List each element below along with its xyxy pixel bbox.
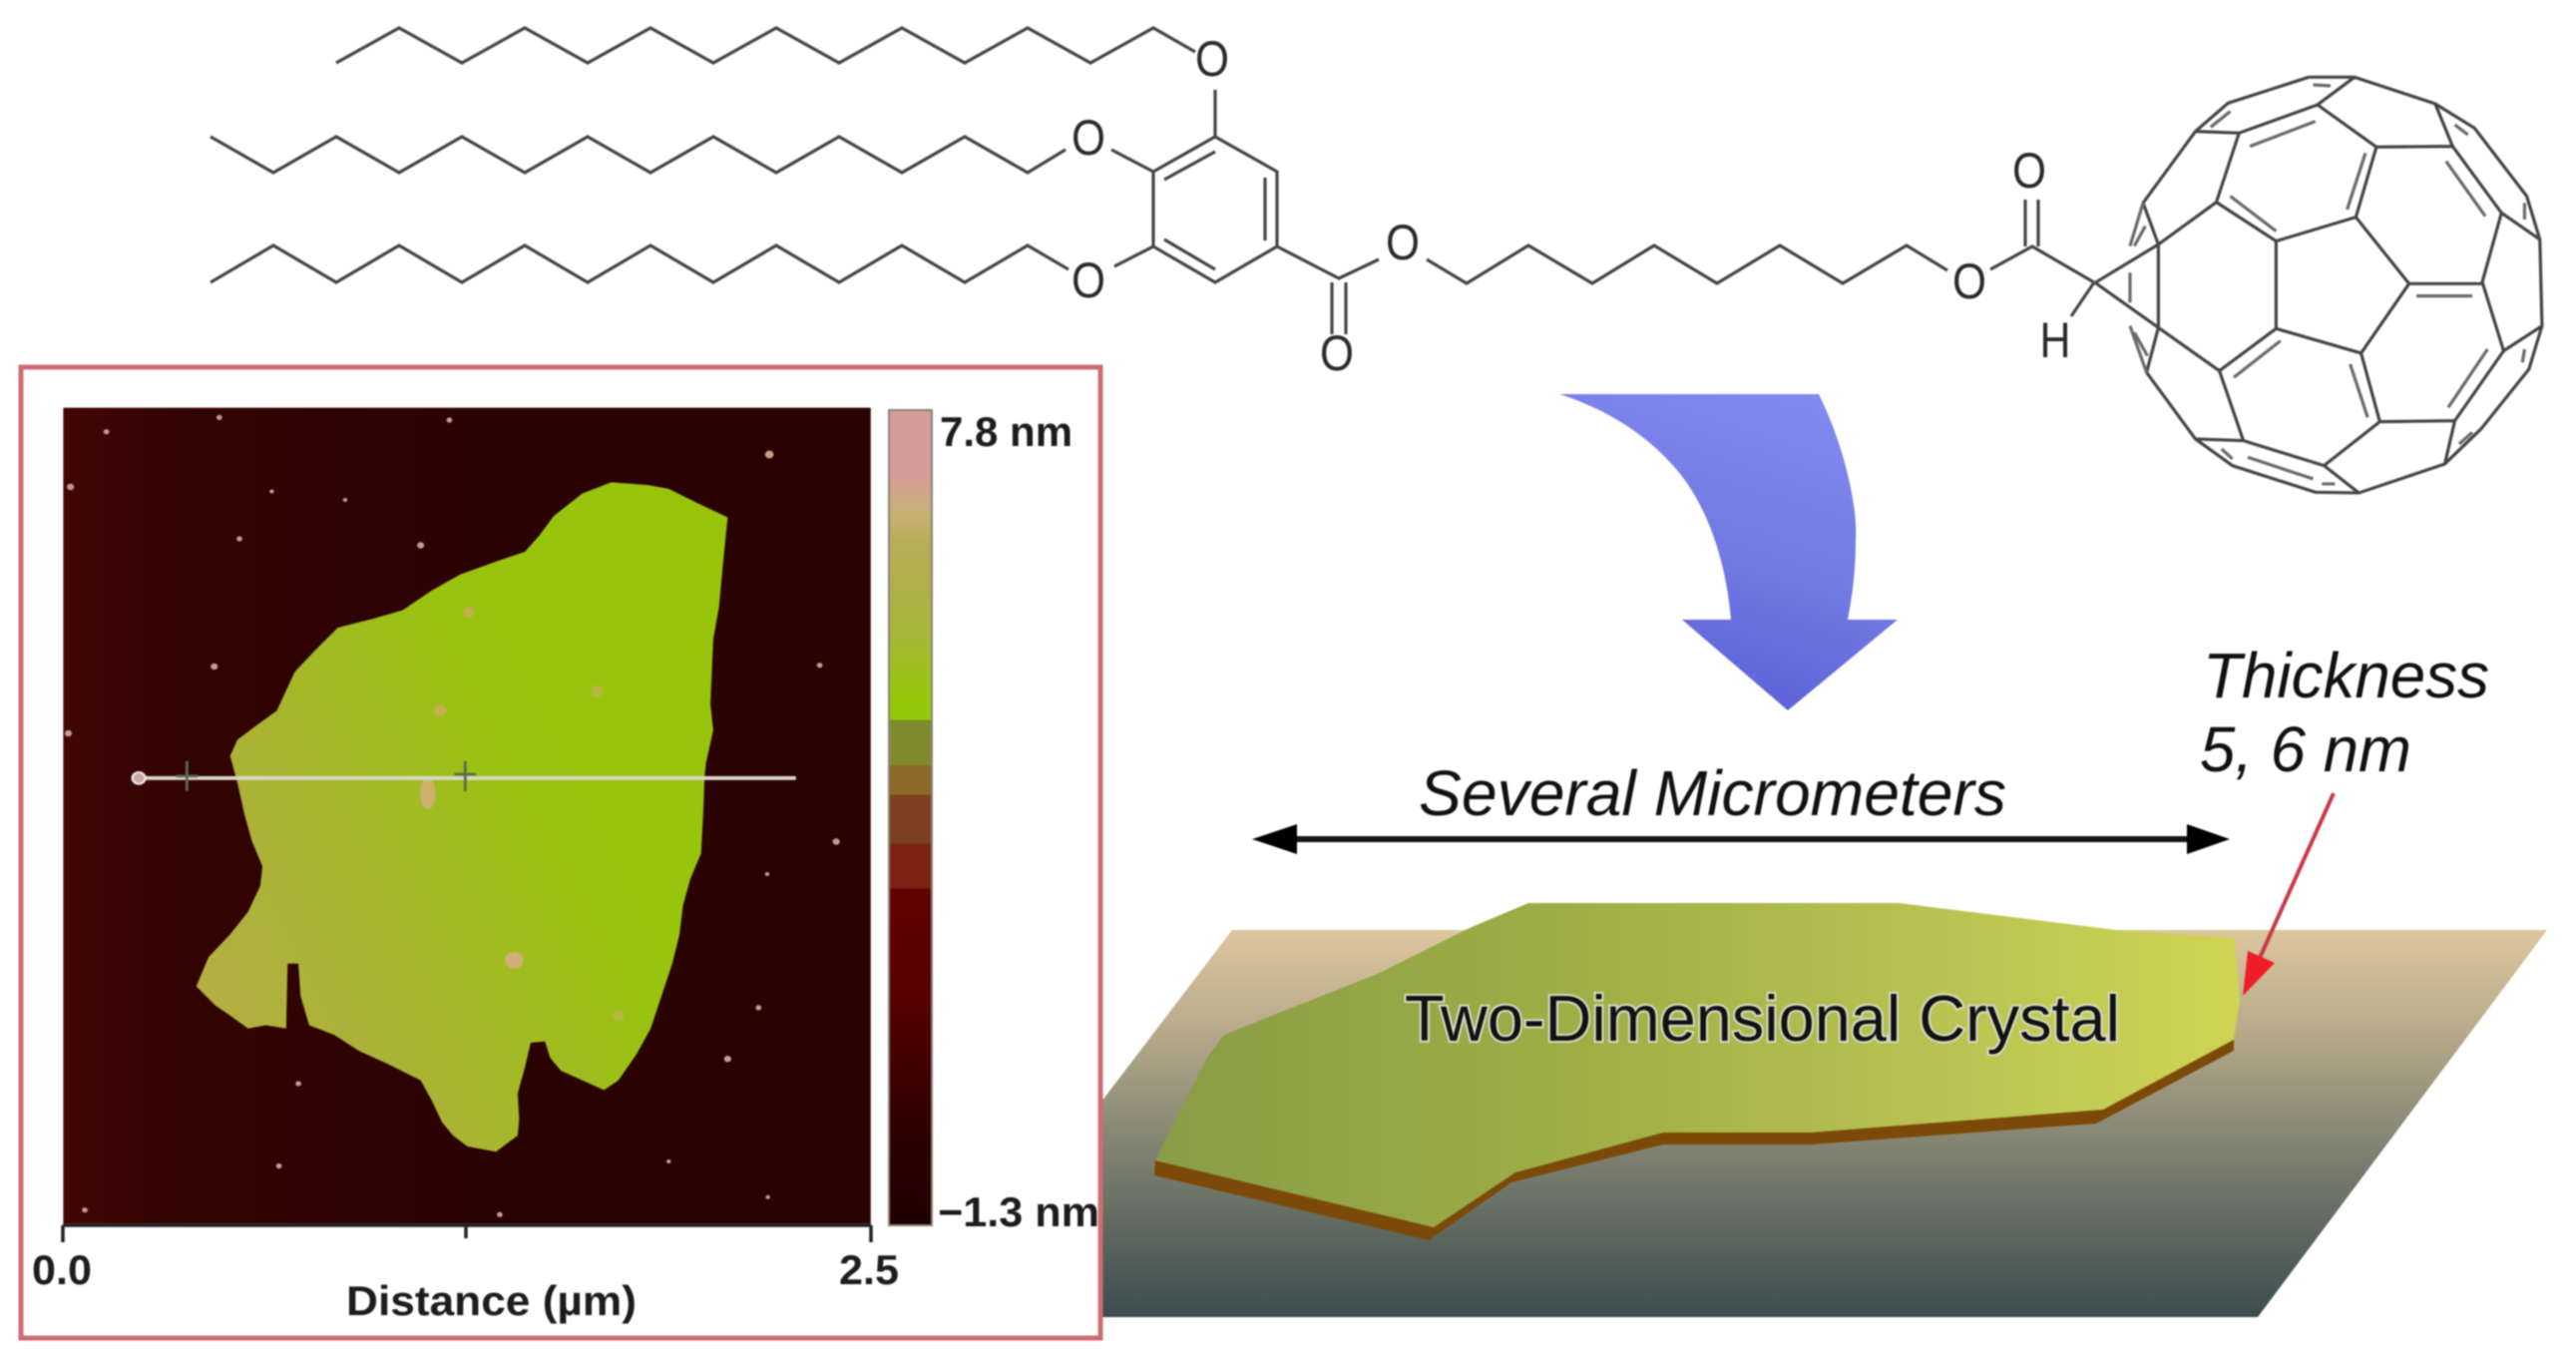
AFM image — [63, 408, 871, 1223]
crystal top face — [1155, 903, 2240, 1227]
crystal island — [197, 482, 727, 1151]
height colour bar — [889, 410, 932, 1225]
top alkyl chain — [336, 28, 1195, 63]
oxygen and hydrogen atom labels: O — [1320, 325, 1354, 381]
width label: Several Micrometers — [1419, 757, 2006, 829]
fullerene inner double bonds — [2130, 85, 2524, 484]
ester group and linker chain — [1277, 200, 2094, 334]
axis start label: 0.0 — [32, 1246, 92, 1293]
oxygen and hydrogen atom labels — [1072, 31, 2071, 381]
oxygen and hydrogen atom labels: O — [1072, 110, 1105, 166]
crystal label: Two-Dimensional Crystal — [1405, 982, 2120, 1055]
thickness label: Thickness — [2203, 640, 2489, 711]
thickness label: 5, 6 nm — [2200, 713, 2411, 785]
C60 fullerene cage — [2095, 77, 2542, 493]
colour bar min label: −1.3 nm — [938, 1188, 1099, 1235]
axis title: Distance (µm) — [346, 1277, 637, 1324]
oxygen and hydrogen atom labels: O — [1072, 252, 1105, 308]
curved blue arrow — [1559, 394, 1898, 710]
substrate plane — [1101, 930, 2547, 1317]
double-headed width arrow — [1252, 824, 2230, 854]
middle alkyl chain — [211, 137, 1066, 173]
axis end label: 2.5 — [839, 1246, 899, 1293]
bottom alkyl chain — [211, 245, 1069, 282]
surface speckles — [65, 415, 840, 1217]
distance axis — [63, 1225, 871, 1242]
scan line with markers — [133, 761, 796, 791]
2D crystal slab — [1154, 903, 2240, 1240]
panel frame — [21, 367, 1100, 1338]
oxygen and hydrogen atom labels: O — [1386, 215, 1420, 270]
benzene ring — [1111, 90, 1277, 282]
oxygen and hydrogen atom labels: H — [2039, 312, 2071, 368]
thickness label — [2200, 640, 2489, 785]
molecule: alkyl chains, benzene ring and linker — [211, 28, 2094, 381]
oxygen and hydrogen atom labels: O — [2012, 143, 2046, 199]
crystal side edge — [1154, 1038, 2234, 1240]
oxygen and hydrogen atom labels: O — [1952, 253, 1986, 309]
oxygen and hydrogen atom labels: O — [1195, 31, 1229, 87]
colour bar max label: 7.8 nm — [940, 408, 1073, 455]
AFM panel — [21, 367, 1100, 1338]
red thickness arrow — [2243, 793, 2334, 996]
